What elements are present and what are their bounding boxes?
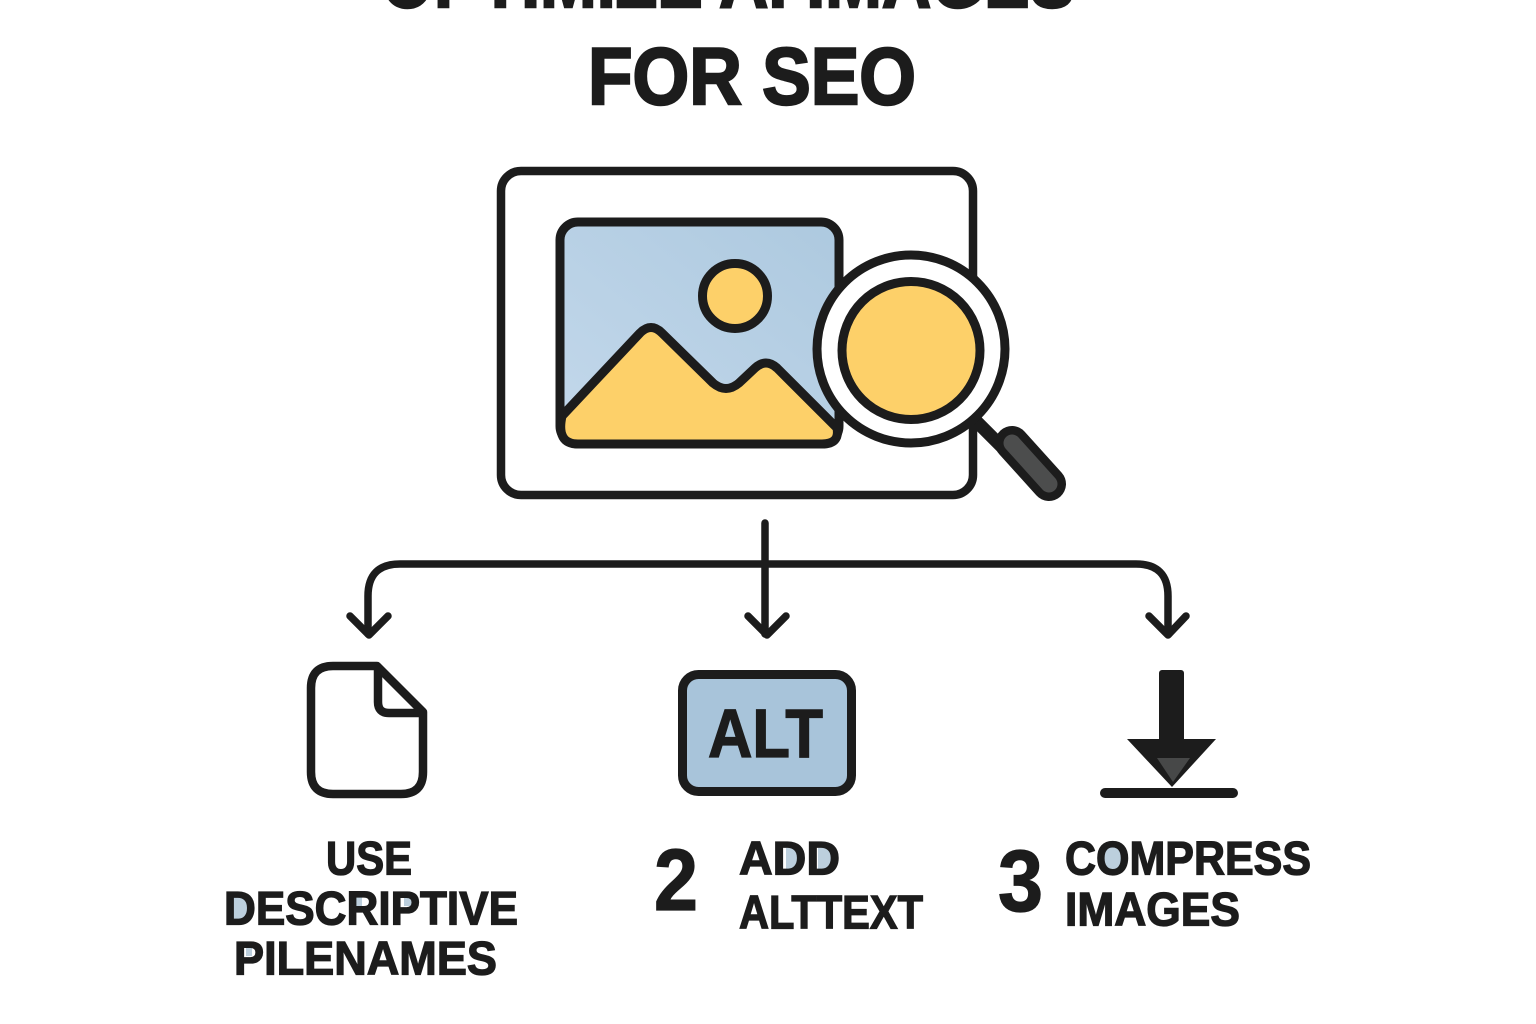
icon: ALT tag (682, 674, 852, 792)
label: add alt text (739, 832, 923, 938)
number 3: 3 (998, 833, 1043, 930)
icon: download / compress arrow (1100, 670, 1238, 798)
title (381, 0, 1075, 122)
hero illustration: image under magnifier (501, 171, 1049, 495)
icon: document (311, 666, 423, 794)
icon: ALT tag: ALT (708, 695, 823, 772)
magnifying glass (817, 255, 1049, 484)
connector arrows (350, 523, 1186, 635)
picture icon (560, 222, 839, 444)
label: compress images: COMPRESS (1065, 832, 1311, 884)
label: add alt text: ALTTEXT (739, 886, 923, 938)
label: add alt text: ADD (739, 832, 840, 884)
label: use descriptive filenames: PILENAMES (234, 932, 497, 984)
number 2: 2 (654, 832, 698, 929)
label: use descriptive filenames (224, 832, 518, 984)
outer frame (501, 171, 973, 495)
label: use descriptive filenames: DESCRIPTIVE (224, 882, 518, 934)
label: compress images: IMAGES (1065, 882, 1240, 936)
title: FOR SEO (588, 32, 916, 122)
label: compress images (1065, 832, 1311, 936)
label: use descriptive filenames: USE (326, 832, 412, 884)
